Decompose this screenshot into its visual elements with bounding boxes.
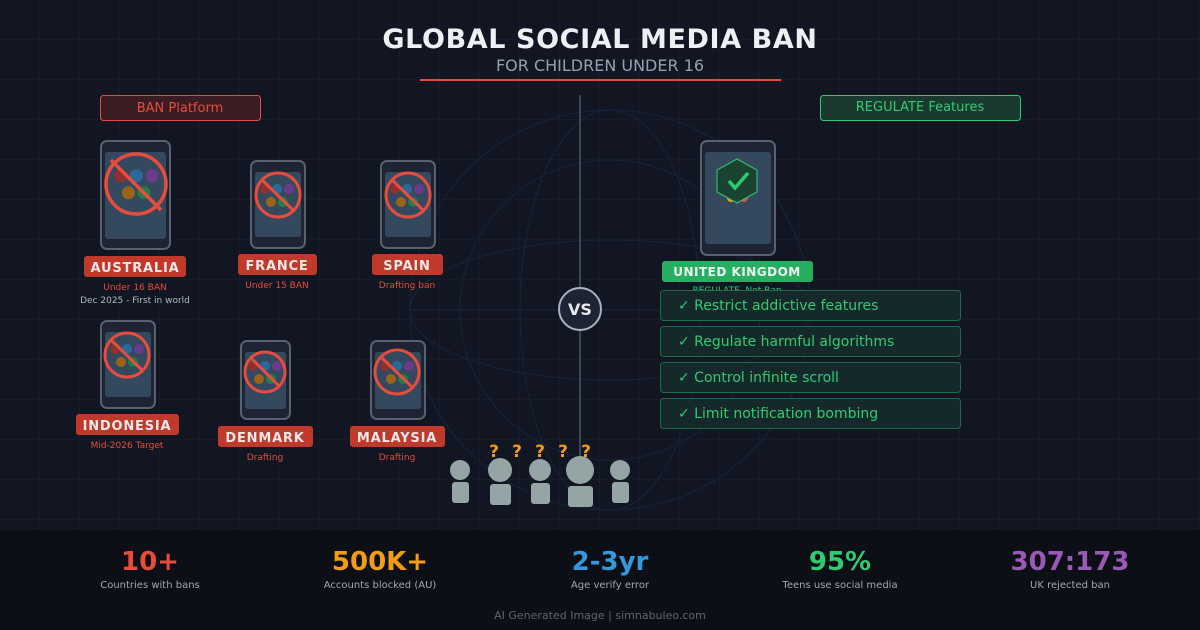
ban platform tag	[100, 96, 260, 120]
phone: Indonesia	[101, 321, 155, 408]
feature list: ✓ Restrict addictive features	[678, 298, 878, 314]
label: United Kingdom: REGULATE, Not Ban	[692, 286, 782, 296]
VS badge	[559, 288, 601, 330]
phone: Denmark	[241, 341, 290, 419]
phone: Malaysia	[371, 341, 425, 419]
label: Malaysia: Drafting	[379, 453, 415, 463]
confused children icons: ?	[489, 442, 499, 462]
stats footer: Age verify error	[571, 580, 650, 591]
label: Australia: AUSTRALIA	[91, 261, 179, 276]
phone: France	[251, 161, 305, 248]
label: France: Under 15 BAN	[245, 281, 309, 291]
feature list: ✓ Control infinite scroll	[678, 370, 839, 386]
label: Australia	[80, 256, 190, 306]
confused children icons: ?	[581, 442, 591, 462]
phone: Australia	[101, 141, 170, 249]
stats footer: 500K+	[332, 547, 428, 577]
confused children icons: ?	[512, 442, 522, 462]
label: France: FRANCE	[245, 259, 309, 274]
phone: Spain	[381, 161, 435, 248]
stats footer: Countries with bans	[100, 580, 200, 591]
label: Malaysia	[350, 426, 445, 463]
label: Indonesia	[76, 414, 179, 451]
regulate features tag: REGULATE Features	[856, 100, 984, 115]
ban platform tag: BAN Platform	[137, 101, 223, 116]
feature list: ✓ Regulate harmful algorithms	[678, 334, 894, 350]
label: Australia: Dec 2025 - First in world	[80, 296, 190, 306]
confused children icons: ?	[535, 442, 545, 462]
stats footer: 307:173	[1011, 547, 1129, 577]
label: Spain	[372, 254, 443, 291]
confused children icons	[450, 442, 630, 507]
confused children icons: ?	[558, 442, 568, 462]
stats footer: Teens use social media	[781, 580, 898, 591]
stats footer: 10+	[121, 547, 179, 577]
label: United Kingdom	[662, 261, 813, 296]
label: Spain: SPAIN	[383, 259, 431, 274]
label: United Kingdom: UNITED KINGDOM	[673, 265, 801, 279]
stats footer: AI Generated Image | simnabuleo.com	[494, 609, 706, 622]
label: Indonesia: Mid-2026 Target	[91, 441, 164, 451]
label: Denmark: DENMARK	[225, 431, 305, 446]
VS badge: VS	[568, 300, 592, 319]
stats footer	[0, 530, 1200, 630]
stats footer: 95%	[809, 547, 871, 577]
regulate features tag	[820, 96, 1020, 120]
label: Spain: Drafting ban	[379, 281, 435, 291]
stats footer: Accounts blocked (AU)	[324, 580, 436, 591]
label: Denmark: Drafting	[247, 453, 283, 463]
phone: United Kingdom with shield	[701, 141, 775, 255]
feature list	[660, 290, 960, 428]
label: Indonesia: INDONESIA	[83, 419, 171, 434]
stats footer: UK rejected ban	[1030, 580, 1110, 591]
stats footer: 2-3yr	[572, 547, 649, 577]
label: Australia: Under 16 BAN	[103, 283, 167, 293]
label: France	[238, 254, 317, 291]
label: Malaysia: MALAYSIA	[357, 431, 437, 446]
label: Denmark	[218, 426, 313, 463]
title: GLOBAL SOCIAL MEDIA BAN	[382, 24, 818, 55]
divider line	[579, 95, 581, 458]
subtitle: FOR CHILDREN UNDER 16	[496, 56, 704, 75]
feature list: ✓ Limit notification bombing	[678, 406, 878, 422]
